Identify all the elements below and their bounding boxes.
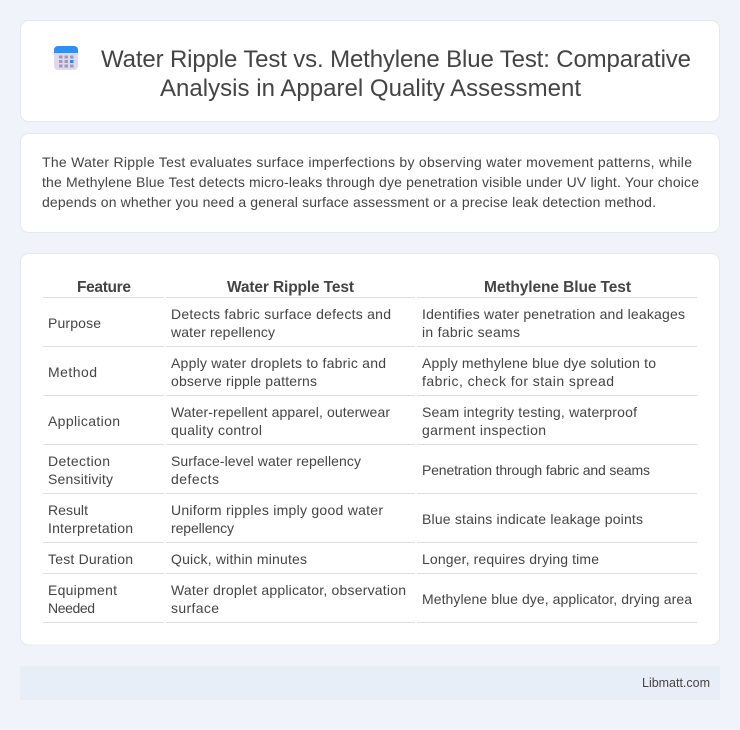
panel: comparison table <box>20 254 720 645</box>
table row: Method: fabric, check for stain spread <box>422 373 614 389</box>
table row: Application <box>43 404 697 445</box>
footer credit: Libmatt.com <box>642 676 710 690</box>
table row: Equipment Needed: Water droplet applicator, observation <box>171 582 406 598</box>
text block: intro paragraph <box>42 154 699 210</box>
table row: Result Interpretation: repellency <box>171 520 234 536</box>
title <box>101 46 691 102</box>
table row: Purpose: Identifies water penetration and leakages <box>422 306 685 322</box>
table row: Test Duration: Longer, requires drying time <box>422 551 599 567</box>
table row: Application: garment inspection <box>422 422 546 438</box>
table row: Equipment Needed: Equipment <box>48 582 117 598</box>
table row: Equipment Needed <box>43 582 697 623</box>
table header row: Methylene Blue Test <box>484 279 631 296</box>
table header row: Water Ripple Test <box>227 279 354 296</box>
table row: Application: Application <box>48 413 120 429</box>
table row: Purpose: water repellency <box>170 324 275 340</box>
table row: Test Duration: Test Duration <box>48 551 133 567</box>
table row: Result Interpretation: Result <box>48 502 88 518</box>
table row: Equipment Needed: Methylene blue dye, applicator, drying area <box>422 591 692 607</box>
table row: Method: Method <box>48 364 97 380</box>
footer <box>20 666 720 700</box>
text block: intro paragraph: The Water Ripple Test evaluates surface imperfections by observing water movement patterns, while <box>42 154 692 170</box>
table row: Method: Apply methylene blue dye solution to <box>422 355 656 371</box>
table row: Detection Sensitivity: Penetration through fabric and seams <box>422 462 650 478</box>
icon: calendar <box>54 46 78 70</box>
table row: Detection Sensitivity: Sensitivity <box>48 471 113 487</box>
table row: Detection Sensitivity: Surface-level water repellency <box>171 453 361 469</box>
table row: Test Duration: Quick, within minutes <box>171 551 307 567</box>
table row: Purpose: in fabric seams <box>422 324 520 340</box>
table row: Purpose <box>43 306 697 347</box>
table row: Purpose: Purpose <box>48 315 101 331</box>
panel: introduction <box>20 134 720 232</box>
table row: Equipment Needed: Needed <box>48 600 95 616</box>
table row: Application: quality control <box>171 422 262 438</box>
title: Water Ripple Test vs. Methylene Blue Test: Comparative <box>101 46 691 73</box>
table row: Method <box>43 355 697 396</box>
table row: Detection Sensitivity: defects <box>171 471 219 487</box>
table row: Detection Sensitivity <box>43 453 697 494</box>
table header row: Feature <box>77 279 131 296</box>
table header row <box>43 279 697 298</box>
table row: Application: Seam integrity testing, waterproof <box>422 404 637 420</box>
table row: Method: observe ripple patterns <box>171 373 317 389</box>
table row: Equipment Needed: surface <box>171 600 219 616</box>
table row: Application: Water-repellent apparel, outerwear <box>171 404 390 420</box>
table row: Purpose: Detects fabric surface defects and <box>171 306 391 322</box>
table row: Method: Apply water droplets to fabric and <box>171 355 386 371</box>
table row: Result Interpretation: Blue stains indicate leakage points <box>422 511 643 527</box>
panel: title header <box>20 20 720 122</box>
text block: intro paragraph: the Methylene Blue Test detects micro-leaks through dye penetration visible under UV light. Your choice <box>42 174 699 190</box>
text block: intro paragraph: depends on whether you need a general surface assessment or a precise leak detection method. <box>42 194 656 210</box>
table row: Detection Sensitivity: Detection <box>48 453 110 469</box>
table row: Test Duration <box>43 551 697 574</box>
title: Analysis in Apparel Quality Assessment <box>160 75 581 102</box>
table row: Result Interpretation: Uniform ripples imply good water <box>171 502 383 518</box>
table row: Result Interpretation: Interpretation <box>48 520 133 536</box>
table row: Result Interpretation <box>43 502 697 543</box>
